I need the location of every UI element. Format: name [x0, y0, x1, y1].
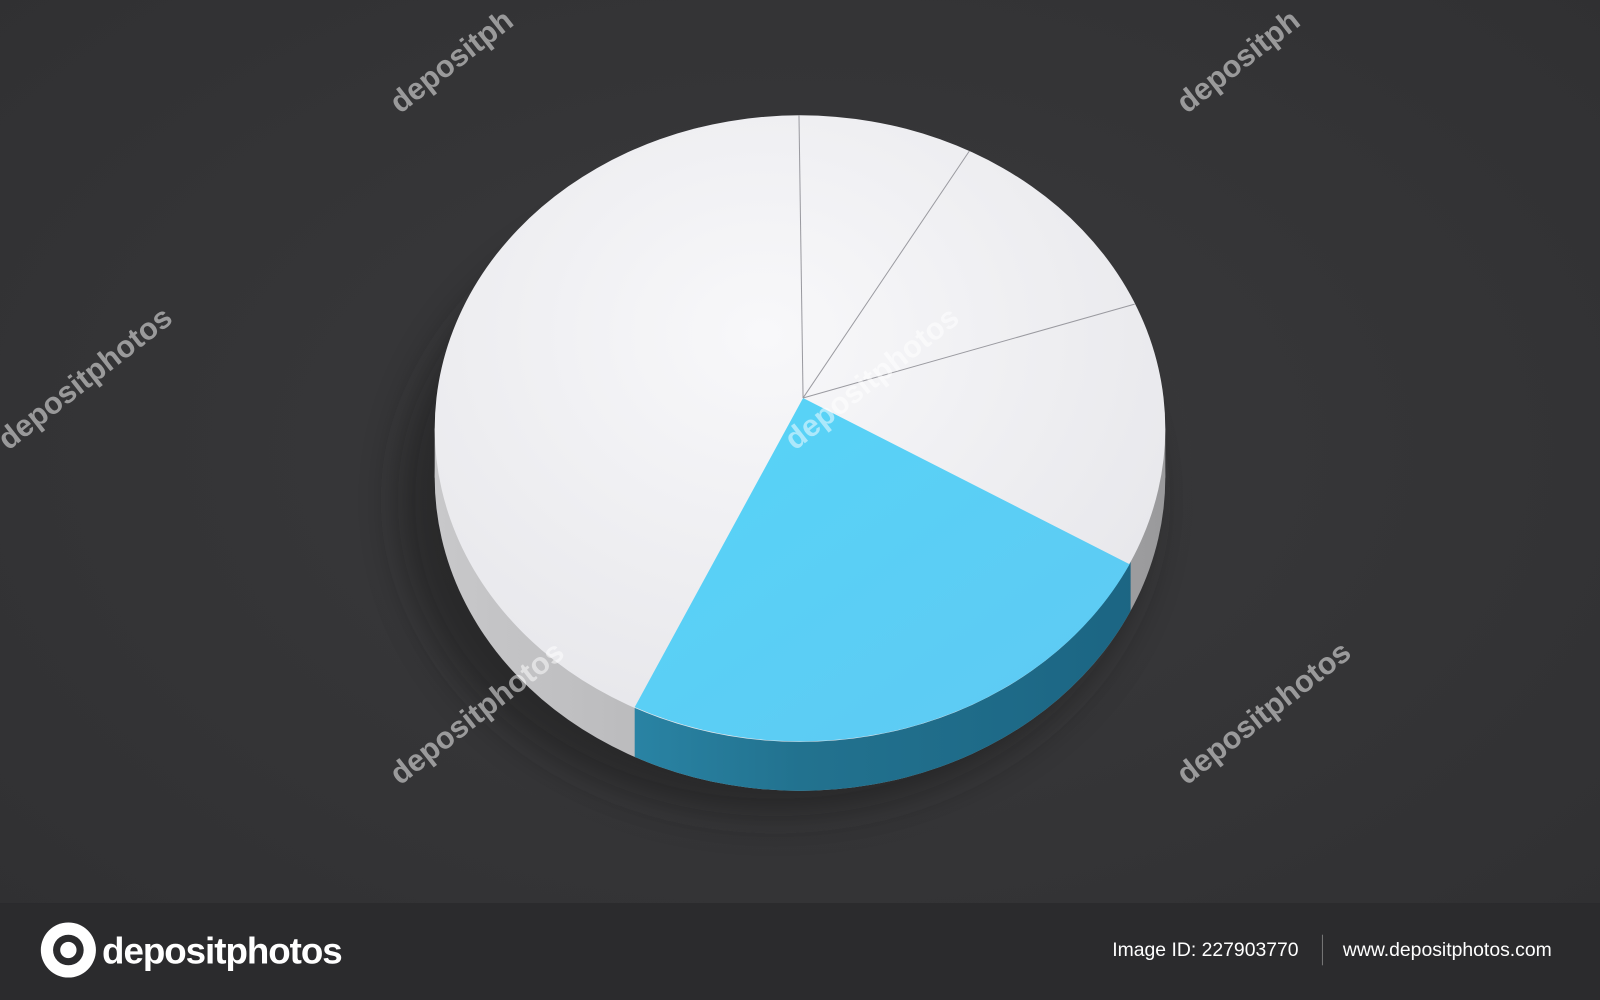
watermarks — [0, 3, 1357, 791]
blue slice — [635, 398, 1130, 741]
pie chart — [398, 115, 1165, 816]
watermarks: depositphotos — [778, 300, 965, 457]
pie top face — [435, 115, 1165, 742]
footer logo: depositphotos — [102, 930, 342, 971]
pie side — [434, 428, 1166, 791]
watermarks: depositph — [1170, 3, 1306, 120]
slice dividers — [799, 115, 1135, 398]
footer logo — [41, 922, 342, 978]
watermarks: depositphotos — [383, 635, 570, 791]
image id: Image ID: 227903770 — [1112, 939, 1299, 961]
watermarks: depositphotos — [1170, 635, 1357, 791]
footer bar — [0, 903, 1600, 1000]
website: www.depositphotos.com — [1342, 939, 1552, 961]
watermarks: depositph — [383, 3, 520, 120]
